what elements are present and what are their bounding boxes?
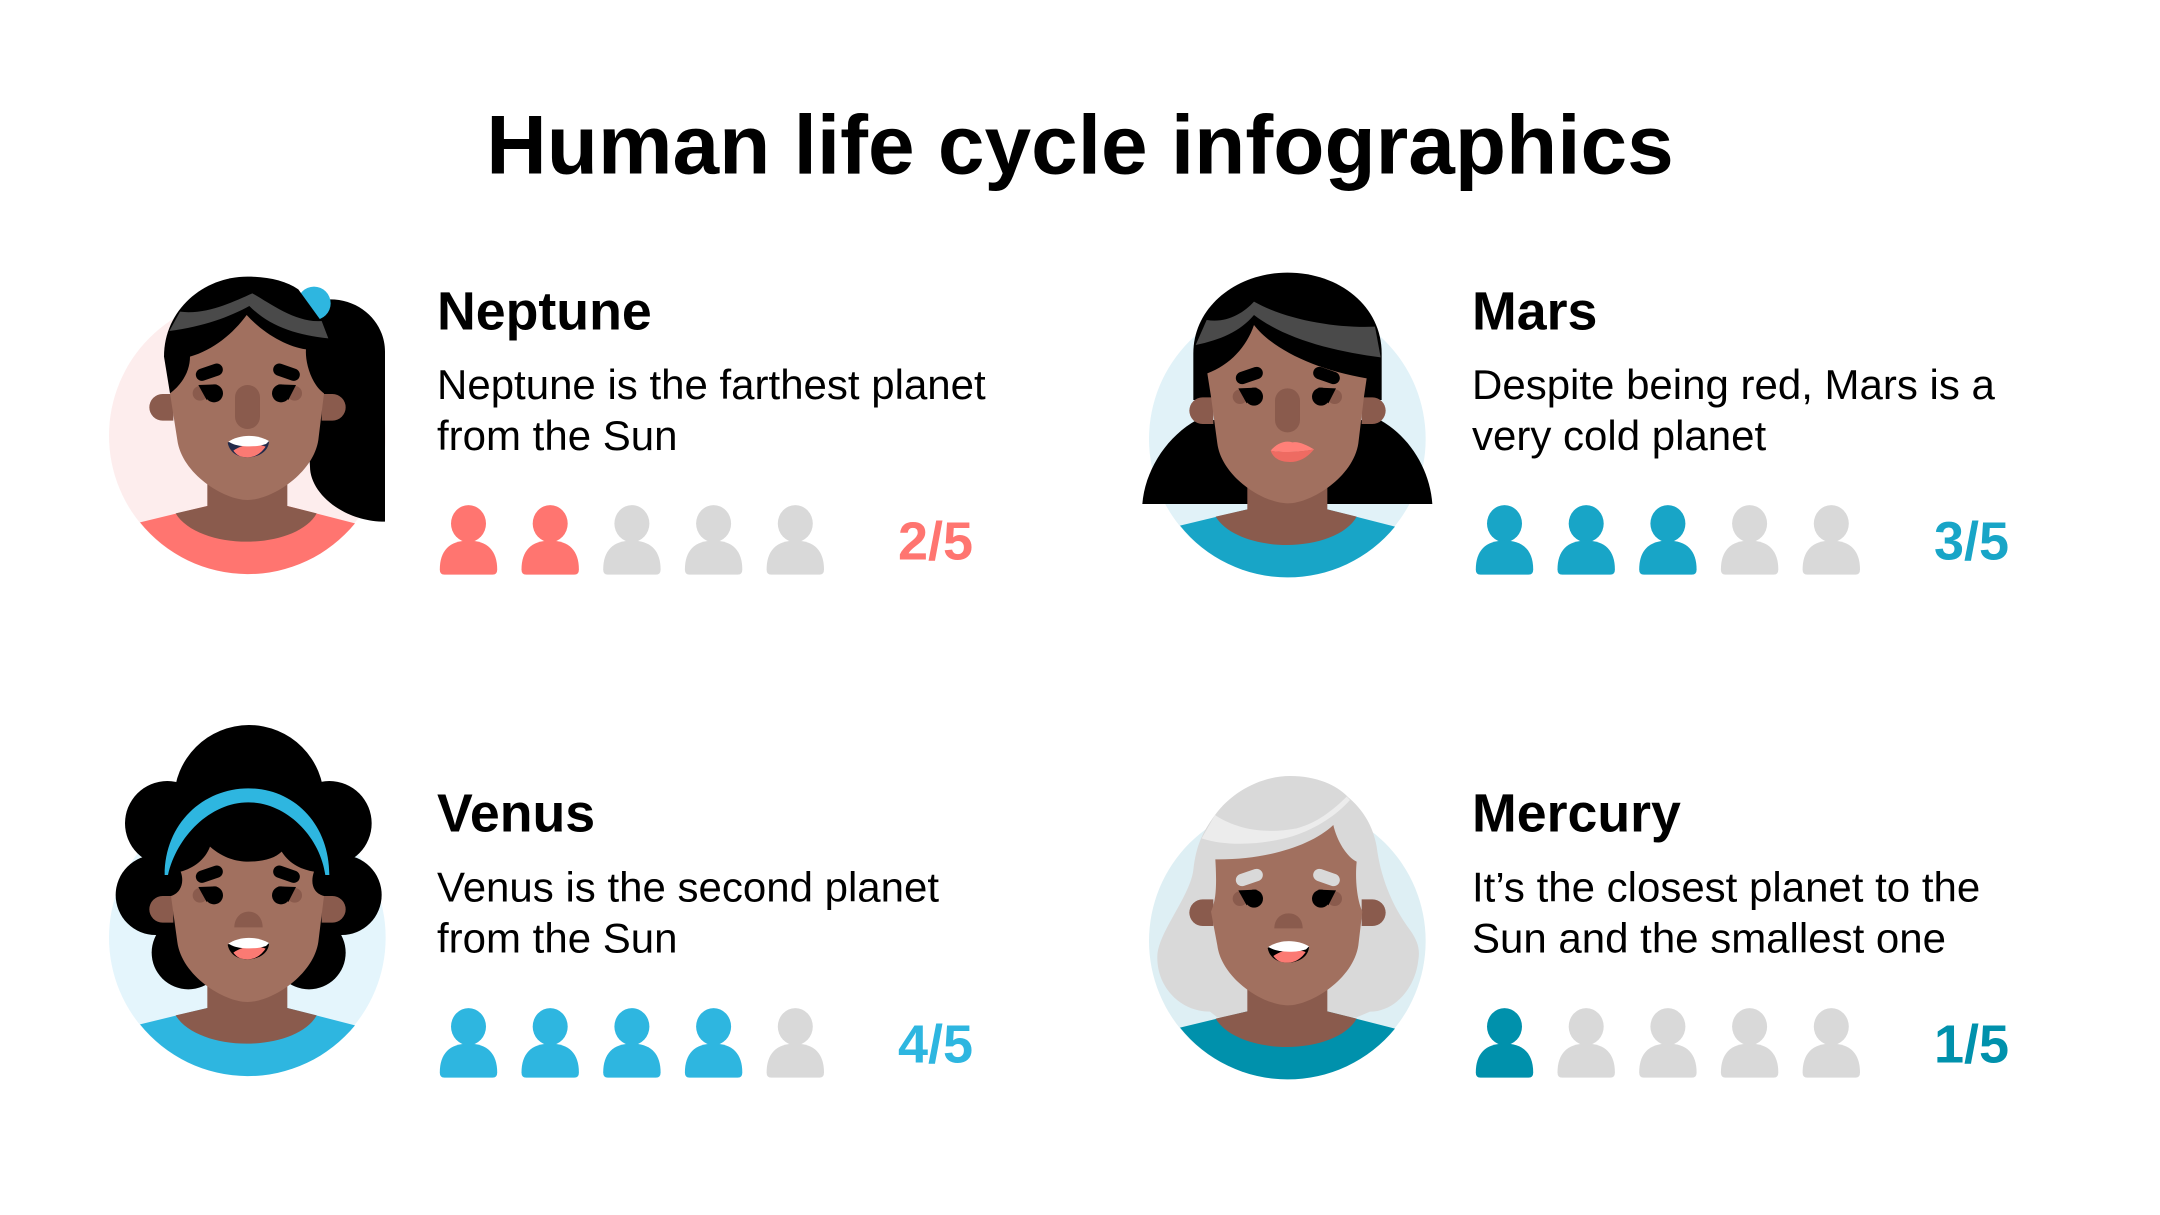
avatar: Venus, woman with curly hair and headband [109,725,386,1076]
score: 4/5: 4/5 [898,1014,973,1074]
avatar: Mars, woman with pigtails [1142,273,1432,577]
rating icons: 4 of 5 [440,1008,824,1078]
score: 3/5: 3/5 [1934,512,2009,572]
panel: Mercury [1149,776,2009,1079]
name: Mercury: Mercury [1472,784,1681,844]
score: 2/5: 2/5 [898,512,973,572]
name: Mars: Mars [1472,282,1597,342]
name: Venus: Venus [437,784,595,844]
rating icons: 3 of 5 [1476,505,1860,575]
panel: Venus [109,725,973,1078]
description: Venus: from the Sun [437,914,677,962]
description: Mercury: It’s the closest planet to the [1472,864,1980,910]
panel: Mars [1142,273,2009,577]
name: Neptune: Neptune [437,282,652,342]
description: Mercury: Sun and the smallest one [1472,914,1946,962]
avatar: Neptune, young woman with ponytail [109,277,386,574]
description: Neptune: from the Sun [437,412,677,459]
title: Human life cycle infographics [486,98,1674,192]
avatar: Mercury, older woman with grey hair [1149,776,1426,1079]
rating icons: 2 of 5 [440,505,824,575]
description: Venus: Venus is the second planet [437,864,939,910]
description: Neptune: Neptune is the farthest planet [437,361,986,408]
description: Mars: Despite being red, Mars is a [1472,361,1996,408]
description: Mars: very cold planet [1472,412,1766,459]
score: 1/5: 1/5 [1934,1014,2009,1074]
panel: Neptune [109,277,986,575]
rating icons: 1 of 5 [1476,1008,1860,1078]
